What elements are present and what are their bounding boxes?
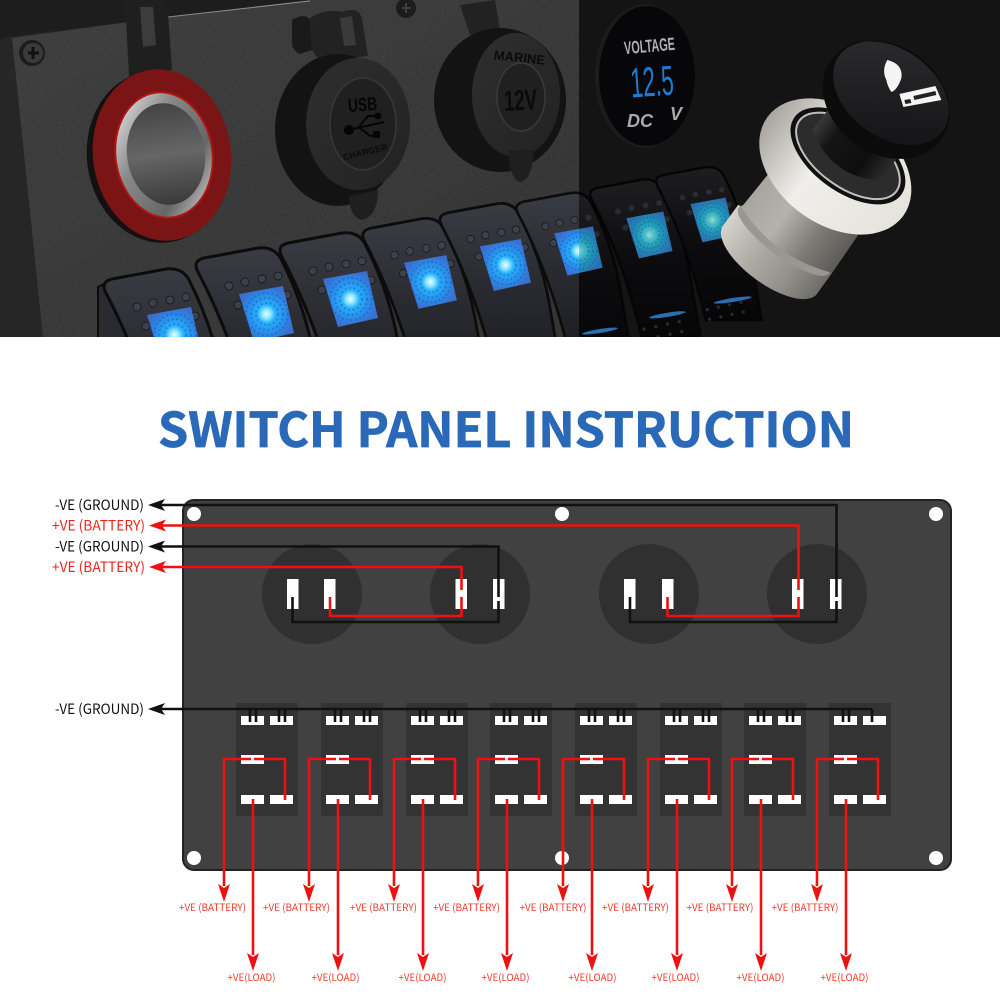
- left wire labels: [52, 495, 145, 719]
- product photo banner: [0, 0, 1000, 337]
- rocker switch 6: [515, 191, 579, 337]
- rocker switch 2: [194, 246, 312, 337]
- rocker switch 3: [278, 231, 398, 337]
- rocker terminal block 2: [303, 703, 383, 971]
- left wire labels: +VE (BATTERY): [52, 557, 145, 577]
- rocker terminal block 5: [557, 703, 637, 971]
- USB charger socket: [275, 10, 410, 220]
- dark overlay panel on right: [579, 0, 1000, 337]
- metal switch plate: [0, 0, 600, 337]
- load labels: [228, 969, 868, 984]
- rocker terminal block 4: [472, 703, 552, 971]
- battery labels: +VE (BATTERY): [602, 899, 669, 914]
- battery labels: [179, 899, 838, 914]
- small screw top: [396, 0, 416, 18]
- cigarette lighter plug: [720, 40, 950, 300]
- left wire labels: -VE (GROUND): [55, 536, 144, 556]
- left wire labels: -VE (GROUND): [55, 495, 144, 515]
- load labels: +VE(LOAD): [568, 969, 616, 984]
- power button with red ring: [86, 7, 232, 243]
- battery labels: +VE (BATTERY): [686, 899, 754, 914]
- battery labels: +VE (BATTERY): [350, 899, 417, 914]
- rocker switch 7: [590, 179, 701, 341]
- rocker switch 8: [656, 167, 762, 321]
- voltage meter: [595, 4, 695, 148]
- rocker switch 6 dark half: [579, 192, 630, 337]
- label: 12V: 12V: [503, 84, 538, 118]
- load labels: +VE(LOAD): [482, 969, 530, 984]
- load labels: +VE(LOAD): [820, 969, 868, 984]
- battery labels: +VE (BATTERY): [520, 899, 586, 914]
- rocker terminal block 1: [218, 703, 298, 971]
- label: DC: DC: [627, 111, 654, 131]
- load labels: +VE(LOAD): [652, 969, 700, 984]
- left wire labels: -VE (GROUND): [55, 699, 144, 719]
- socket terminals: [287, 579, 842, 609]
- rocker terminal block 6: [642, 703, 722, 971]
- label: VOLTAGE: VOLTAGE: [623, 34, 676, 58]
- plug body: [742, 175, 858, 273]
- rocker switch 1: [97, 267, 214, 337]
- icon: white logo: [884, 60, 941, 107]
- socket footprints: [262, 544, 867, 644]
- left wire labels: +VE (BATTERY): [52, 516, 145, 536]
- label: V: V: [670, 104, 684, 124]
- label: USB: USB: [347, 94, 378, 117]
- ground bus for rocker switches: [160, 709, 872, 722]
- battery labels: +VE (BATTERY): [263, 899, 330, 914]
- battery labels: +VE (BATTERY): [772, 899, 838, 914]
- title: SWITCH PANEL INSTRUCTION: [158, 391, 854, 461]
- load labels: +VE(LOAD): [228, 969, 276, 984]
- rocker terminal block 8: [811, 703, 891, 971]
- plug cap: [823, 40, 950, 159]
- icon: corner screw: [19, 40, 45, 66]
- panel plate: [183, 500, 951, 870]
- rocker terminal block 7: [726, 703, 806, 971]
- socket wiring black: [160, 505, 836, 622]
- rocker terminal block 3: [388, 703, 468, 971]
- wiring diagram panel: [160, 500, 951, 971]
- 12V marine socket: [434, 0, 566, 182]
- plug flange: [759, 98, 912, 235]
- battery labels: +VE (BATTERY): [433, 899, 500, 914]
- icon: USB trident: [345, 114, 384, 137]
- load labels: +VE(LOAD): [398, 969, 446, 984]
- rocker switch 4: [361, 217, 480, 337]
- battery labels: +VE (BATTERY): [179, 899, 246, 914]
- rocker switch 5: [438, 202, 556, 337]
- label: MARINE: MARINE: [493, 47, 546, 68]
- plug lower collar: [720, 204, 832, 300]
- socket wiring red: [160, 526, 798, 616]
- load labels: +VE(LOAD): [312, 969, 360, 984]
- mounting holes: [187, 507, 943, 865]
- load labels: +VE(LOAD): [736, 969, 784, 984]
- label: CHARGER: CHARGER: [342, 142, 389, 162]
- digital reading: 12.5: [629, 57, 675, 106]
- arrows to left labels: [148, 499, 166, 715]
- plug neck: [812, 110, 896, 180]
